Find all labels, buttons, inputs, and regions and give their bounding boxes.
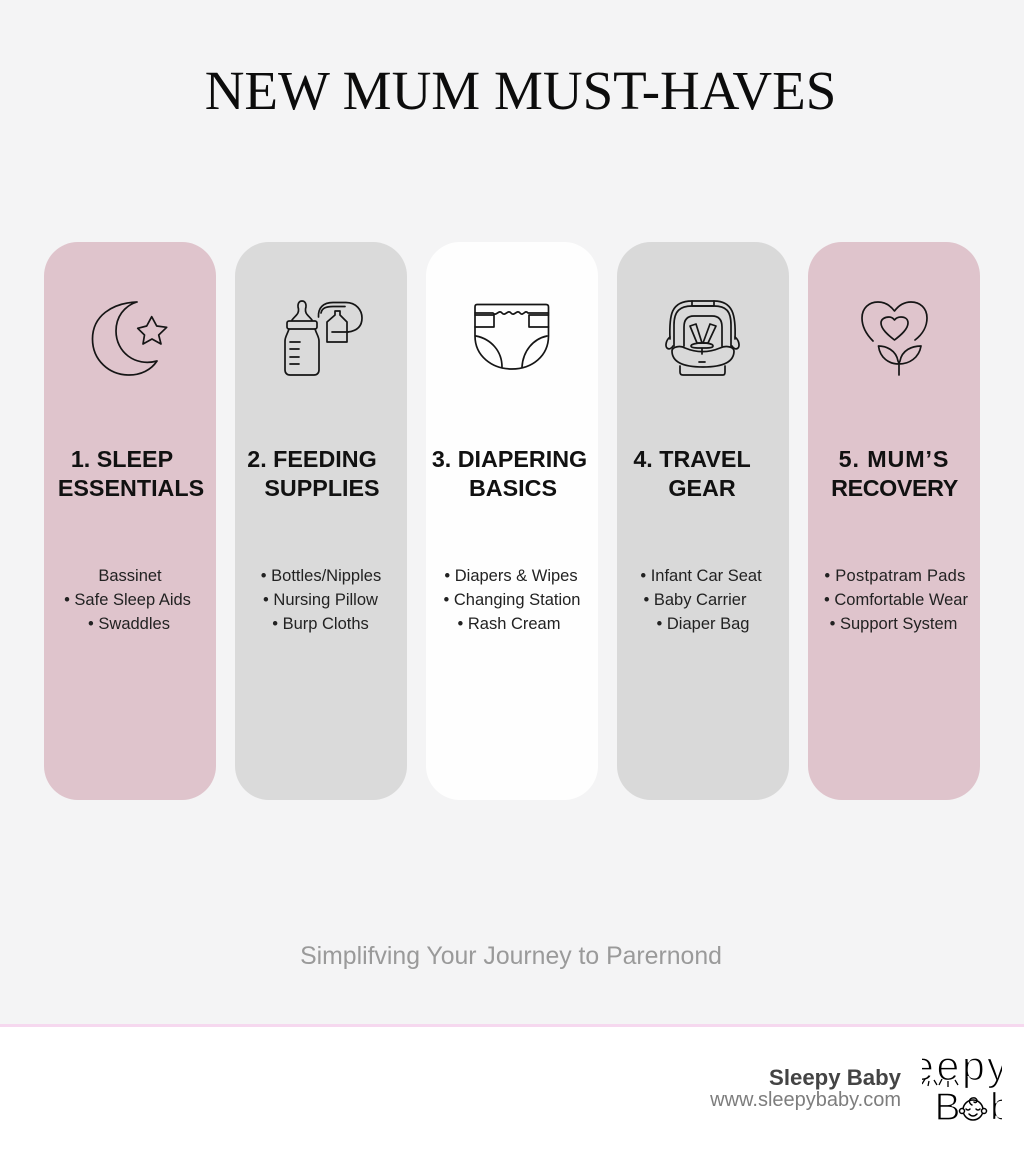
list: travel gear: • Diaper Bag xyxy=(657,615,749,633)
icon: heart and sprout xyxy=(861,301,928,376)
list: diapering basics: • Diapers & Wipes xyxy=(444,567,578,585)
icon: diaper xyxy=(474,304,550,370)
heading: diapering basics: 3. DIAPERING xyxy=(432,446,587,472)
heading: sleep essentials: 1. SLEEP xyxy=(71,446,173,472)
logo xyxy=(922,1054,1002,1124)
heading: mum's recovery: 5. MUM’S xyxy=(839,446,949,472)
panel: travel gear xyxy=(617,242,789,800)
list: feeding supplies xyxy=(261,567,381,633)
heading: mum's recovery: RECOVERY xyxy=(831,475,958,501)
heading: feeding supplies: SUPPLIES xyxy=(264,475,380,501)
list: diapering basics: • Rash Cream xyxy=(458,615,560,633)
list: sleep essentials: Bassinet xyxy=(98,567,162,585)
list: travel gear: • Infant Car Seat xyxy=(640,567,762,585)
panel: diapering basics xyxy=(426,242,598,800)
heading: sleep essentials: ESSENTIALS xyxy=(58,475,204,501)
list: mum's recovery: • Postpatram Pads xyxy=(824,567,966,585)
title: NEW MUM MUST-HAVES xyxy=(205,60,836,121)
heading: sleep essentials xyxy=(58,446,204,501)
tagline: Simplifving Your Journey to Parernond xyxy=(300,943,722,970)
brand name: Sleepy Baby xyxy=(769,1065,901,1090)
list: mum's recovery: • Support System xyxy=(830,615,957,633)
panel: mum's recovery xyxy=(808,242,980,800)
heading: mum's recovery xyxy=(831,446,958,501)
footer xyxy=(0,1024,1024,1154)
list: travel gear: • Baby Carrier xyxy=(644,591,746,609)
icon: moon and star xyxy=(92,301,168,376)
list: feeding supplies: • Nursing Pillow xyxy=(263,591,378,609)
website: www.sleepybaby.com xyxy=(710,1089,901,1111)
heading: diapering basics xyxy=(432,446,587,501)
heading: diapering basics: BASICS xyxy=(469,475,557,501)
list: travel gear xyxy=(640,567,762,633)
list: mum's recovery: • Comfortable Wear xyxy=(824,591,968,609)
list: mum's recovery xyxy=(824,567,968,633)
icon: bottle and breast pump xyxy=(284,300,363,376)
heading: travel gear: GEAR xyxy=(668,475,736,501)
heading: travel gear xyxy=(633,446,751,501)
list: diapering basics xyxy=(444,567,580,633)
panel: feeding supplies xyxy=(235,242,407,800)
heading: feeding supplies: 2. FEEDING xyxy=(247,446,377,472)
list: feeding supplies: • Bottles/Nipples xyxy=(261,567,381,585)
heading: feeding supplies xyxy=(247,446,380,501)
list: feeding supplies: • Burp Cloths xyxy=(272,615,369,633)
panel: sleep essentials xyxy=(44,242,216,800)
icon: infant car seat xyxy=(665,300,740,376)
list: sleep essentials: • Swaddles xyxy=(88,615,170,633)
list: diapering basics: • Changing Station xyxy=(444,591,580,609)
heading: travel gear: 4. TRAVEL xyxy=(633,446,751,472)
list: sleep essentials: • Safe Sleep Aids xyxy=(64,591,191,609)
list: sleep essentials xyxy=(64,567,191,633)
